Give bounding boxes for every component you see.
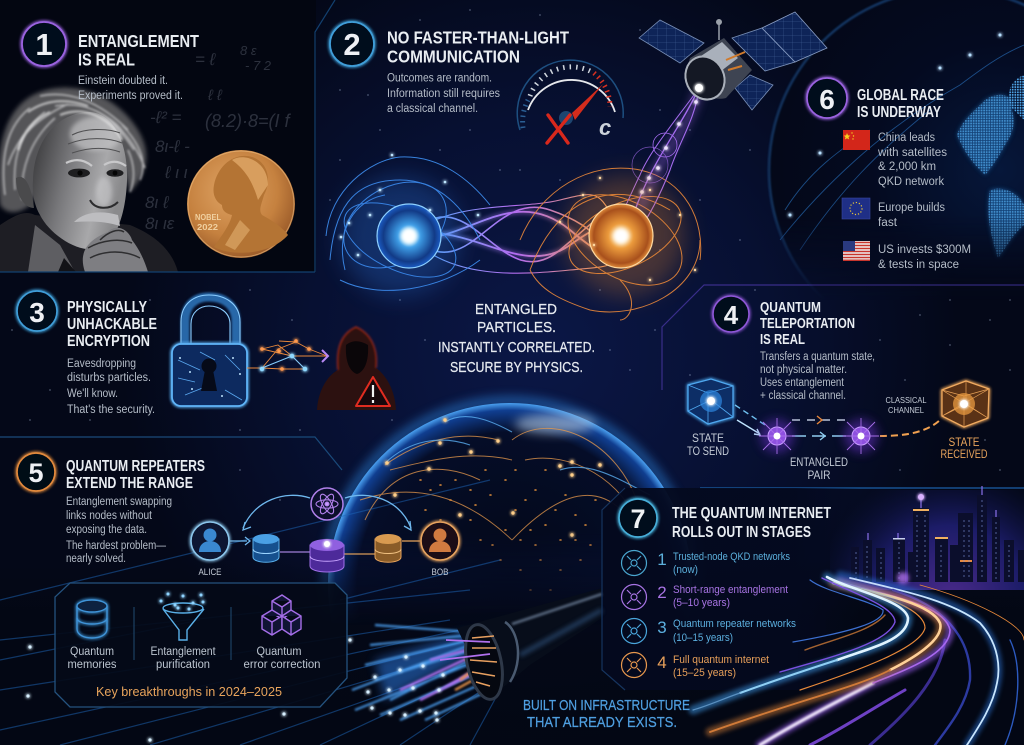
road of light (693, 575, 1024, 745)
description (66, 496, 172, 565)
description: exposing the data. (66, 524, 147, 536)
caption: Key breakthroughs in 2024–2025 (96, 684, 282, 699)
badge 2: 2 (343, 27, 361, 62)
labels: purification (156, 659, 210, 671)
heading: QUANTUM REPEATERS (66, 458, 205, 475)
chalkboard equations: - 7 2 (245, 58, 272, 73)
heading: ROLLS OUT IN STAGES (672, 524, 811, 541)
heading: ENCRYPTION (67, 333, 150, 350)
description (67, 358, 155, 416)
icon: satellite (639, 12, 827, 110)
badge 6 (807, 78, 847, 118)
icon: orange state cube (942, 381, 989, 427)
closing statement (523, 697, 690, 731)
text: Europe: Europe builds (878, 202, 945, 214)
panel 7 frame (602, 488, 625, 690)
central earth with network arcs (316, 390, 690, 614)
labels: CLASSICAL (886, 396, 927, 405)
icon: speed gauge with c limit (517, 60, 623, 143)
text: US (878, 244, 971, 271)
chalkboard equations (145, 43, 292, 233)
heading: GLOBAL RACE (857, 87, 944, 104)
description: Uses entanglement (760, 377, 845, 389)
icon: hooded hacker (317, 327, 396, 410)
icon: error-correction cubes (262, 595, 301, 635)
icon: blue state cube (688, 379, 733, 424)
Bob node (421, 522, 459, 560)
description: We'll know. (67, 388, 118, 400)
text: China: with satellites (877, 147, 947, 159)
names: BOB (432, 567, 448, 578)
description: The hardest problem— (66, 540, 166, 552)
stage 3: 3 (657, 618, 667, 637)
badge 5 (17, 453, 55, 491)
heading (672, 505, 831, 541)
labels: PAIR (808, 470, 830, 482)
heading: TELEPORTATION (760, 316, 855, 332)
center statement: SECURE BY PHYSICS. (450, 359, 583, 376)
labels: error correction (244, 659, 320, 671)
beam to satellite (615, 88, 699, 228)
text: US: & tests in space (878, 259, 959, 271)
heading (857, 87, 944, 121)
badge 4: 4 (724, 300, 739, 330)
memory: blue (253, 534, 279, 562)
chalkboard equations: 8ι ιε (145, 214, 175, 233)
description: Experiments proved it. (78, 90, 183, 102)
icon: Nobel medal: 2022 (197, 223, 219, 232)
purple stream (760, 582, 950, 745)
atom icon (311, 488, 343, 520)
heading: NO FASTER-THAN-LIGHT (387, 28, 569, 48)
red cross (547, 115, 570, 143)
names: ALICE (198, 567, 222, 578)
stage 3: (10–15 years) (673, 632, 733, 644)
stage 2 (622, 583, 788, 610)
chalkboard equations: 8ι-ℓ - (155, 137, 190, 156)
panel 7 backing (602, 488, 860, 690)
heading: IS REAL (760, 332, 805, 348)
connections (230, 495, 420, 554)
labels: Entanglement (150, 646, 216, 658)
labels: STATE (692, 433, 724, 445)
text: Europe: fast (878, 217, 898, 229)
heading: THE QUANTUM INTERNET (672, 505, 831, 522)
description: nearly solved. (66, 553, 126, 565)
description: Eavesdropping (67, 358, 136, 370)
blue stream (693, 577, 908, 710)
labels: ENTANGLED (790, 457, 848, 469)
blue orb (340, 155, 478, 296)
labels: Quantum (70, 646, 114, 658)
description: a classical channel. (387, 103, 478, 115)
inner left lanes (793, 580, 883, 642)
city skyline (830, 486, 1024, 590)
chalkboard equations: ℓ ι ι (164, 163, 188, 182)
panel: key breakthroughs (55, 583, 347, 707)
stage 3: Quantum repeater networks (673, 618, 796, 630)
text: China: & 2,000 km (878, 161, 936, 173)
heading: UNHACKABLE (67, 316, 157, 333)
description: Information still requires (387, 88, 500, 100)
labels: RECEIVED (940, 449, 988, 461)
badge 4 (713, 296, 749, 332)
labels: STATE (948, 437, 980, 449)
stage 1: 1 (657, 550, 667, 569)
labels: CHANNEL (888, 406, 925, 415)
panel: 3 unhackable encryption (17, 291, 396, 416)
badge 2 (330, 22, 374, 66)
panel: 7 quantum internet stages (619, 499, 831, 679)
panel: 5 quantum repeaters (17, 453, 459, 578)
icon: quantum memory (77, 600, 107, 638)
heading: IS REAL (78, 50, 135, 70)
badge 7 (619, 499, 657, 537)
description: Transfers a quantum state, (760, 351, 875, 363)
chalkboard equations: = ℓ (195, 50, 216, 69)
badge 7: 7 (630, 504, 646, 534)
panel: 1 entanglement is real (0, 22, 295, 272)
right planet (767, 0, 1024, 286)
description: Einstein doubted it. (78, 75, 168, 87)
description: Entanglement swapping (66, 496, 172, 508)
labels (687, 396, 988, 482)
orange stream (710, 583, 940, 732)
chalkboard equations: 8ι ℓ (145, 193, 169, 212)
labels (68, 646, 320, 671)
fiber-optic streak field (0, 480, 500, 745)
text: China: China leads (878, 132, 935, 144)
stage 2: (5–10 years) (673, 597, 730, 609)
stage 1: Trusted-node QKD networks (673, 551, 790, 563)
heading (387, 28, 569, 66)
chalkboard equations: 8 ε (240, 43, 257, 58)
stage 1: (now) (673, 564, 698, 576)
chalkboard equations: -ℓ² = (150, 108, 182, 127)
heading (67, 299, 157, 350)
stage 4 (622, 652, 769, 679)
flag: US (843, 241, 870, 261)
closing statement: THAT ALREADY EXISTS. (527, 714, 677, 731)
heading (78, 31, 199, 70)
icon: Nobel medal: NOBEL (195, 213, 221, 222)
memory: purple (310, 539, 344, 572)
fiber cable (440, 588, 602, 703)
continents (957, 75, 1024, 258)
description: Outcomes are random. (387, 72, 492, 84)
description: not physical matter. (760, 364, 847, 376)
arrows between nodes (735, 405, 940, 440)
network arrow to eavesdropper (247, 341, 328, 369)
entangled pair (759, 418, 879, 454)
entangled orbs and ribbons (326, 88, 701, 320)
text: Europe (878, 202, 945, 229)
stage 4: 4 (657, 653, 667, 672)
icon: purification funnel (161, 594, 204, 640)
center statement: ENTANGLED (475, 301, 557, 318)
orange orb (560, 176, 695, 296)
badge 3: 3 (29, 297, 45, 328)
heading: QUANTUM (760, 300, 821, 316)
heading: EXTEND THE RANGE (66, 475, 193, 492)
labels: TO SEND (687, 446, 729, 458)
stage 4: (15–25 years) (673, 667, 736, 679)
description (387, 72, 500, 115)
stage 1 (622, 550, 790, 576)
stage 2: 2 (657, 583, 667, 602)
heading: IS UNDERWAY (857, 104, 942, 121)
description: disturbs particles. (67, 372, 151, 384)
badge 1 (22, 22, 66, 66)
labels: Quantum (256, 646, 302, 658)
blue orbit lines (326, 157, 490, 293)
stage 2: Short-range entanglement (673, 584, 788, 596)
description (78, 75, 183, 102)
badge 5: 5 (28, 458, 44, 488)
badge 3 (17, 291, 57, 331)
center statement (438, 301, 595, 376)
heading: COMMUNICATION (387, 46, 520, 66)
flag: China (843, 130, 870, 150)
description: That's the security. (67, 404, 155, 416)
description: links nodes without (66, 510, 153, 522)
icon: glowing padlock (172, 295, 247, 406)
memory: orange (375, 534, 401, 562)
text: China (877, 132, 947, 188)
panel: 4 quantum teleportation (687, 296, 989, 482)
stage 3 (622, 618, 796, 644)
icon: warning triangle (356, 377, 390, 406)
heading: PHYSICALLY (67, 299, 147, 316)
icon: speed gauge with c limit: c (599, 115, 611, 140)
flag: EU (842, 198, 870, 219)
chalkboard equations: (8.2)·8=(I f (205, 111, 292, 131)
icon: Nobel medal (187, 150, 295, 258)
orange orbit lines (520, 168, 701, 320)
outer blue stream (840, 575, 998, 745)
portrait: Einstein (0, 88, 178, 272)
Alice node (191, 522, 229, 560)
panel: 2 no faster-than-light communication (330, 22, 623, 143)
heading (66, 458, 205, 492)
panel frames (0, 0, 1024, 488)
description: + classical channel. (760, 390, 846, 402)
center statement: INSTANTLY CORRELATED. (438, 339, 595, 356)
description (760, 351, 875, 402)
stage 4: Full quantum internet (673, 654, 769, 666)
badge 6: 6 (819, 84, 835, 115)
badge 1: 1 (35, 27, 53, 62)
center statement: PARTICLES. (477, 319, 556, 336)
names (198, 567, 448, 578)
heading (760, 300, 855, 348)
text: China: QKD network (878, 176, 944, 188)
panel: 6 global race (807, 78, 971, 271)
repeater chain diagram (191, 488, 459, 578)
closing statement: BUILT ON INFRASTRUCTURE (523, 697, 690, 714)
chalkboard equations: ℓ ℓ (207, 87, 223, 104)
heading: ENTANGLEMENT (78, 31, 199, 51)
ribbons between orbs (409, 195, 621, 273)
labels: memories (68, 659, 117, 671)
text: US: US invests $300M (878, 244, 971, 256)
